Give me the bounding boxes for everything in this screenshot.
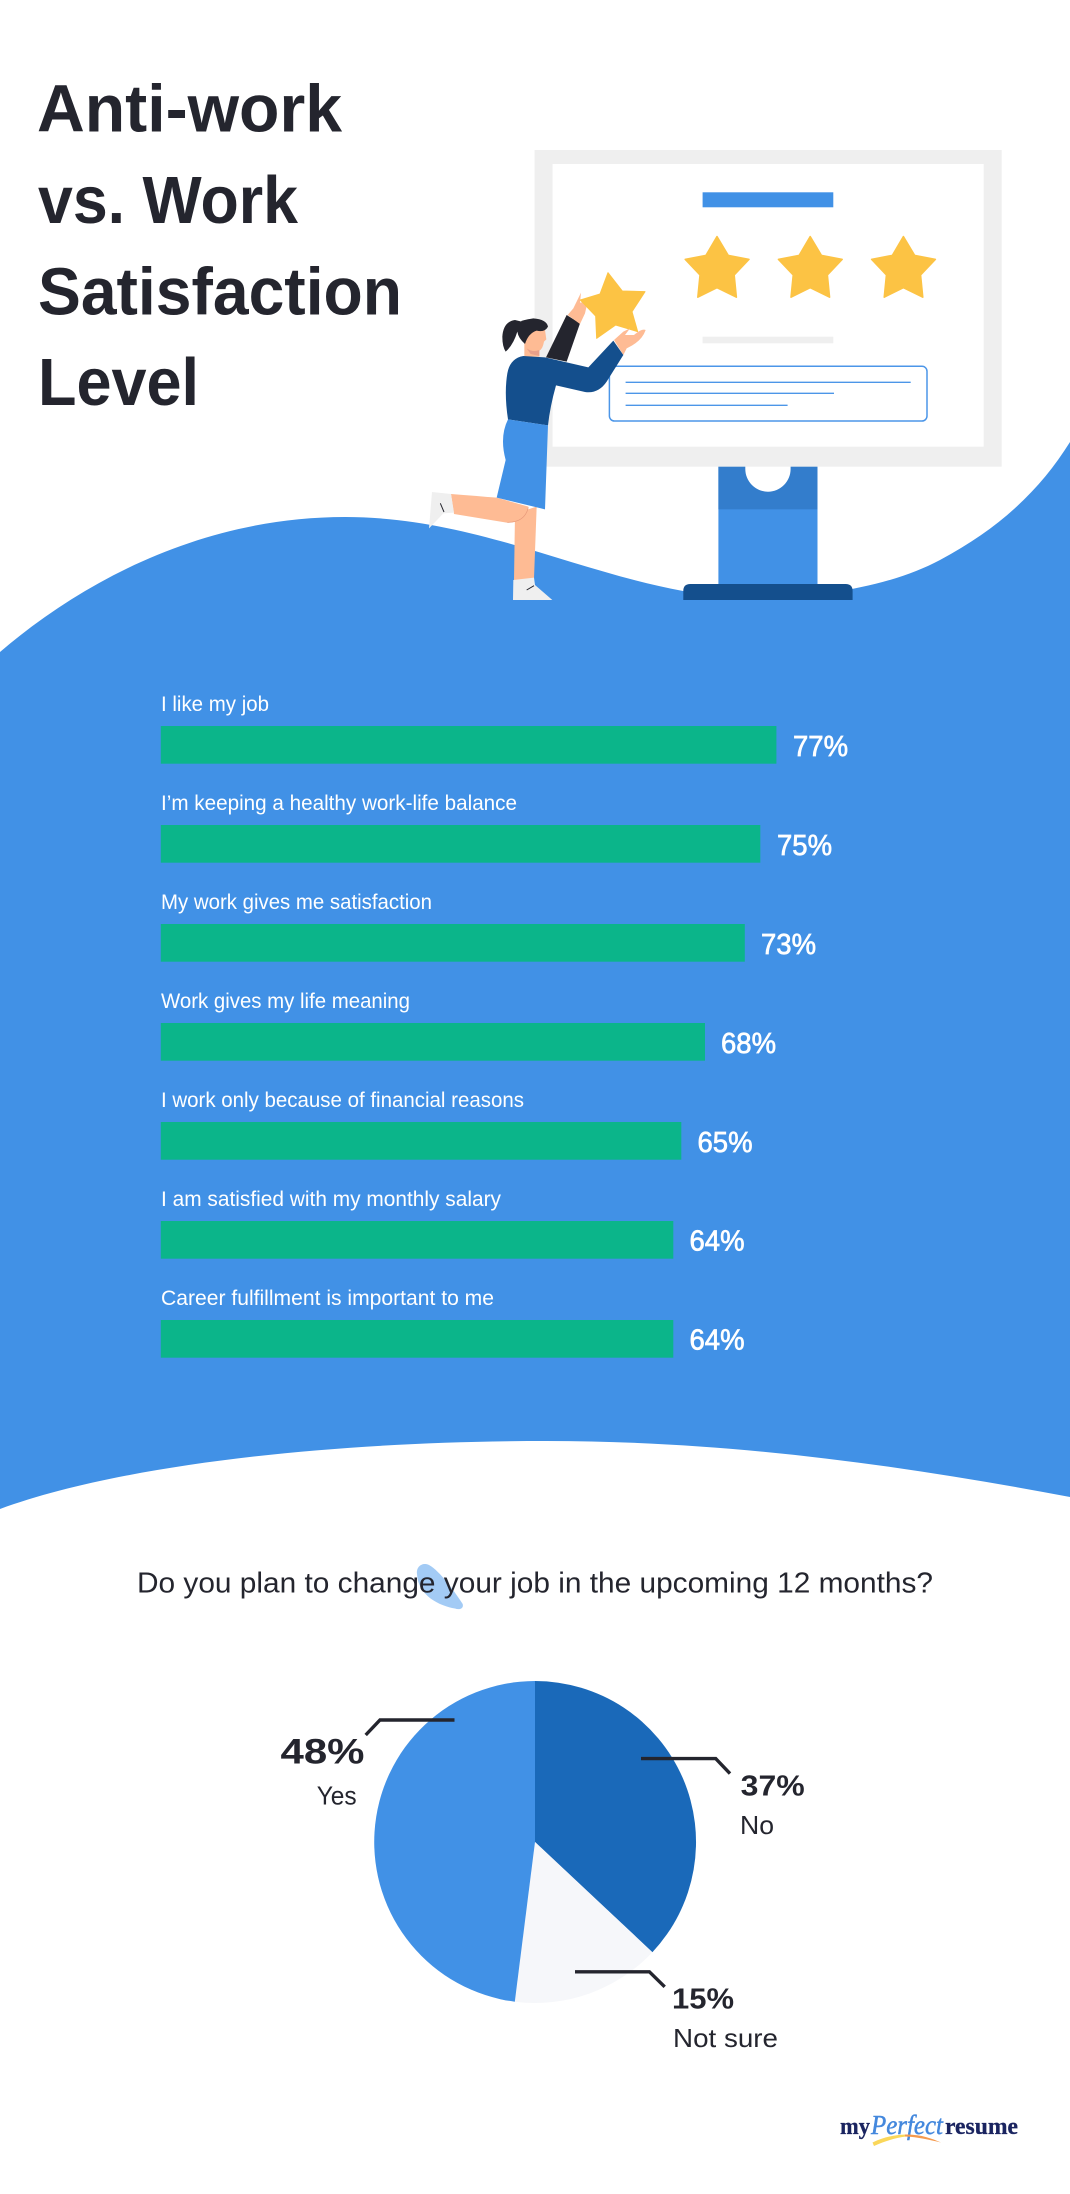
monitor stand [683,466,853,600]
knee crease [507,507,528,522]
decorative blob behind question [417,1564,463,1609]
bar: life meaning [161,989,776,1061]
callout: No 37%: No [740,1810,774,1840]
raised leg [451,494,528,523]
title [37,72,402,420]
stars on screen [685,236,935,297]
slice: Not sure 15% [515,1842,652,2003]
review text box [609,366,927,421]
skirt [497,419,548,509]
question heading: Do you plan to change your job in the upcoming 12 months? [137,1568,933,1600]
front hand [614,328,646,355]
bar chart: work satisfaction [161,692,848,1358]
callout: Yes 48%: 48% [280,1733,364,1772]
monitor screen [535,150,1002,467]
callout: Yes 48% [280,1720,454,1811]
bar: I like my job [161,692,848,764]
title: vs. Work [38,163,299,238]
bar: career fulfillment: 64% [690,1324,744,1356]
logo: myPerfectResume: Perfect [870,2110,944,2140]
logo: myPerfectResume [840,2110,1018,2146]
title: Satisfaction [38,254,402,329]
callout: Yes 48%: Yes [317,1781,357,1811]
bar: financial reasons: 65% [698,1127,752,1159]
bar: monthly salary [161,1187,745,1259]
bar: work gives satisfaction [161,890,816,962]
bar: life meaning: 68% [721,1028,776,1060]
illustration: woman holding a star [429,273,646,600]
bar: I like my job: I like my job [161,692,269,716]
hair [502,318,548,352]
bar: career fulfillment: Career fulfillment is important to me [161,1286,494,1310]
callout: No 37%: 37% [741,1771,805,1803]
bar: monthly salary: 64% [690,1226,744,1258]
bar: healthy work-life balance: I’m keeping a healthy work-life balance [161,791,517,815]
bar: financial reasons [161,1088,753,1160]
held star [580,273,645,338]
standing shoe [513,578,552,600]
callout: Not sure 15% [575,1972,778,2053]
bar: I like my job: 77% [793,731,848,763]
illustration: monitor with rating stars [535,150,1002,600]
bar: monthly salary: I am satisfied with my monthly salary [161,1187,501,1211]
slice: Yes 48% [374,1681,535,2002]
bar: work gives satisfaction: My work gives me satisfaction [161,890,432,914]
blue wave background [0,442,1070,1509]
logo: myPerfectResume: my [840,2114,870,2140]
slice: No 37% [535,1681,696,1952]
torso and front arm [506,341,623,425]
neck shadow [527,348,539,356]
callout: Not sure 15%: 15% [672,1984,734,2016]
raised shoe [429,492,454,528]
back arm [546,315,580,362]
bar: work gives satisfaction: 73% [761,929,816,961]
title: Level [38,345,199,420]
pie chart [374,1681,696,2003]
bar: career fulfillment [161,1286,745,1358]
neck and face [524,327,546,357]
title: Anti-work [37,72,343,147]
shoe laces [440,503,534,590]
bar: healthy work-life balance: 75% [777,830,832,862]
logo: myPerfectResume: resume [945,2114,1018,2140]
bar: life meaning: Work gives my life meaning [161,989,410,1013]
callout: Not sure 15%: Not sure [673,2023,778,2053]
standing leg [514,507,537,581]
bar: financial reasons: I work only because of financial reasons [161,1088,524,1112]
upper hand [568,293,588,324]
bar: healthy work-life balance [161,791,832,863]
callout: No 37% [641,1759,805,1840]
